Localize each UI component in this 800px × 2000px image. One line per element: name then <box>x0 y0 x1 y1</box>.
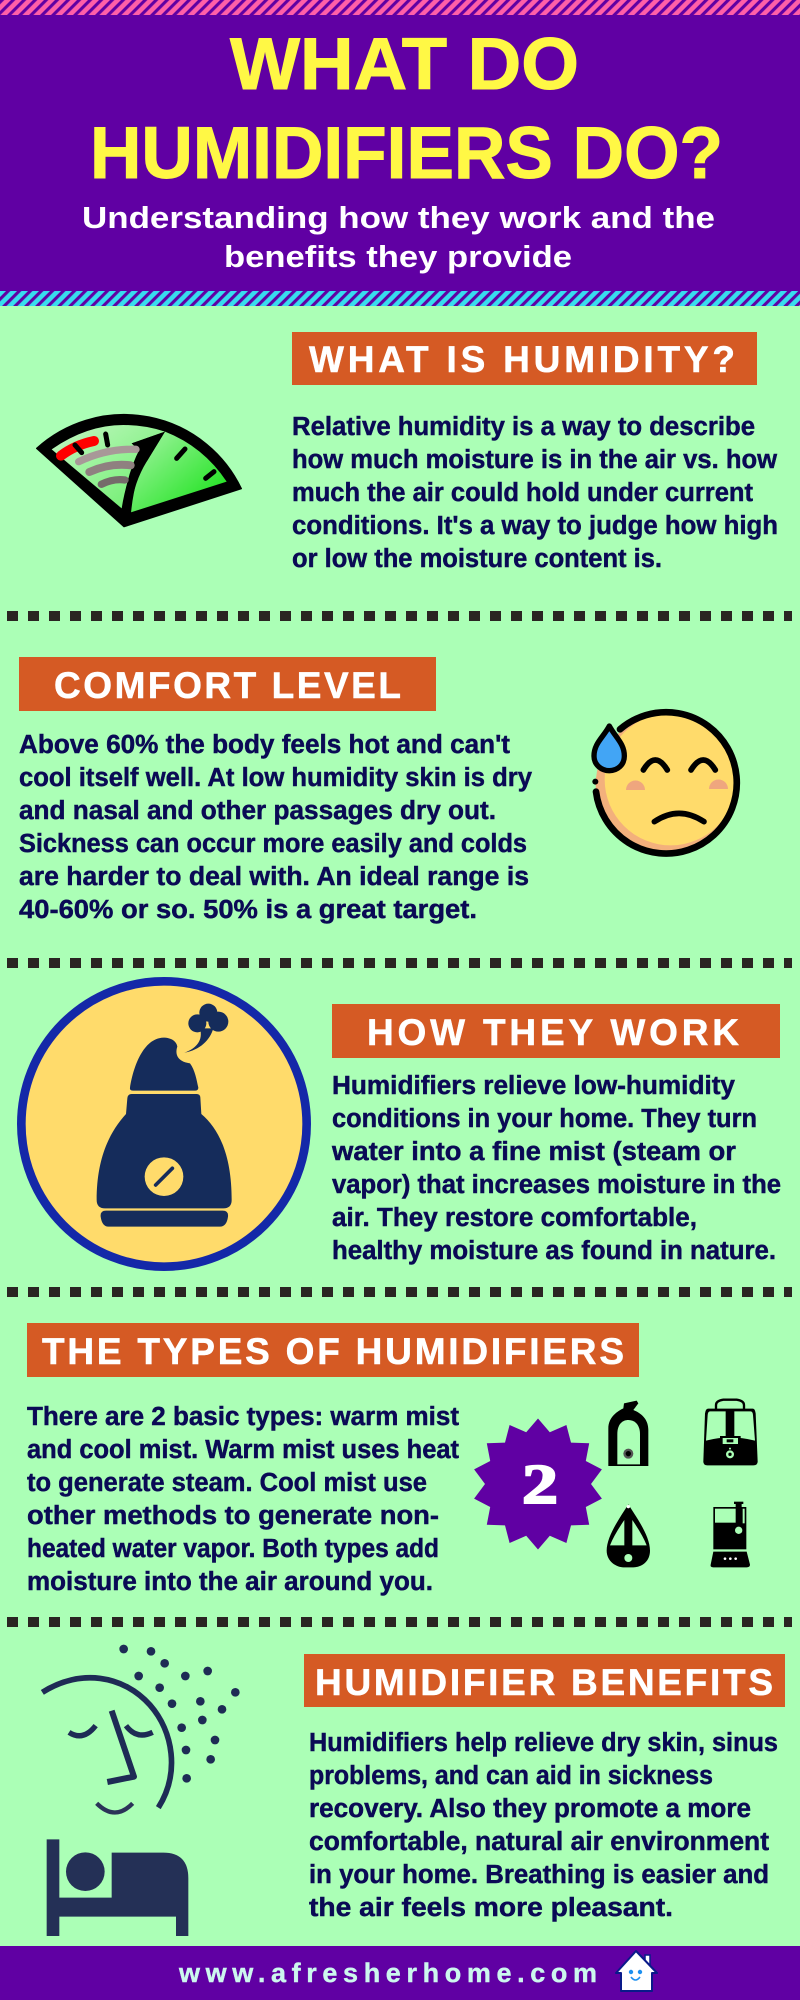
icon: smiling house <box>616 1951 657 1991</box>
text: types of humidifiers: to generate steam. Cool mist use <box>27 1469 427 1497</box>
heading: types of humidifiers: THE TYPES OF HUMIDIFIERS <box>42 1331 624 1372</box>
divider <box>7 611 792 621</box>
text: how they work: Humidifiers relieve low-humidity <box>332 1072 736 1100</box>
text: comfort level: and nasal and other passages dry out. <box>19 797 496 825</box>
icon: square humidifier <box>711 1502 750 1567</box>
text: comfort level: are harder to deal with. An ideal range is <box>19 863 529 891</box>
text: types of humidifiers: other methods to generate non- <box>27 1502 439 1530</box>
text: what is humidity <box>292 413 778 573</box>
heading: how they work <box>332 1004 780 1058</box>
icon: tall humidifier <box>608 1401 648 1466</box>
text: what is humidity: conditions. It's a way to judge how high <box>292 512 778 540</box>
title: WHAT DO <box>230 24 579 105</box>
text: what is humidity: or low the moisture content is. <box>292 545 662 573</box>
heading: comfort level <box>19 657 436 711</box>
section: how they work <box>21 981 781 1267</box>
title: HUMIDIFIERS DO? <box>90 113 723 194</box>
text: types of humidifiers: and cool mist. Warm mist uses heat <box>27 1436 460 1464</box>
icon: sweating sad face <box>592 712 737 855</box>
website url: www.afresherhome.com <box>178 1958 597 1988</box>
subtitle: Understanding how they work and the <box>82 200 715 235</box>
text: humidifier benefits: problems, and can aid in sickness <box>309 1762 713 1790</box>
section: humidifier benefits <box>42 1645 785 1936</box>
text: comfort level: Above 60% the body feels hot and can't <box>19 731 511 759</box>
text: humidifier benefits: the air feels more pleasant. <box>309 1894 673 1922</box>
footer <box>0 1946 800 2000</box>
text: humidifier benefits: recovery. Also they promote a more <box>309 1795 751 1823</box>
text: what is humidity: much the air could hold under current <box>292 479 753 507</box>
text: types of humidifiers: moisture into the air around you. <box>27 1568 433 1596</box>
icon: teardrop humidifier <box>607 1504 650 1567</box>
heading: how they work: HOW THEY WORK <box>367 1012 739 1053</box>
section: what is humidity <box>37 332 778 573</box>
text: humidifier benefits: in your home. Breathing is easier and <box>309 1861 769 1889</box>
text: comfort level: Sickness can occur more easily and colds <box>19 830 527 858</box>
text: what is humidity: Relative humidity is a way to describe <box>292 413 755 441</box>
text: humidifier benefits <box>309 1729 778 1922</box>
icon: handled humidifier <box>703 1400 758 1465</box>
icon: sleeping face with mist <box>42 1645 240 1812</box>
text: what is humidity: how much moisture is in the air vs. how <box>292 446 777 474</box>
section: comfort level <box>19 657 737 924</box>
divider <box>7 1617 792 1627</box>
divider <box>7 1287 792 1297</box>
text: types of humidifiers: There are 2 basic types: warm mist <box>27 1403 460 1431</box>
heading: what is humidity: WHAT IS HUMIDITY? <box>309 339 735 380</box>
text: humidifier benefits: comfortable, natural air environment <box>309 1828 770 1856</box>
icon: humidifier in circle <box>21 981 307 1267</box>
text: how they work <box>331 1072 781 1265</box>
text: comfort level: 40-60% or so. 50% is a great target. <box>19 896 477 924</box>
heading: comfort level: COMFORT LEVEL <box>54 665 401 706</box>
text: how they work: air. They restore comfortable, <box>332 1204 697 1232</box>
text: humidifier benefits: Humidifiers help relieve dry skin, sinus <box>309 1729 778 1757</box>
text: types of humidifiers: heated water vapor. Both types add <box>27 1535 439 1563</box>
subtitle <box>82 200 715 274</box>
heading: humidifier benefits: HUMIDIFIER BENEFITS <box>315 1662 773 1703</box>
text: how they work: conditions in your home. They turn <box>332 1105 757 1133</box>
text: types of humidifiers <box>27 1403 460 1596</box>
icon: humidity gauge <box>37 415 241 527</box>
text: how they work: healthy moisture as found in nature. <box>332 1237 776 1265</box>
text: comfort level <box>19 731 533 924</box>
text: comfort level: cool itself well. At low humidity skin is dry <box>19 764 533 792</box>
header banner <box>0 0 800 306</box>
top pink stripe <box>0 0 800 15</box>
subtitle: benefits they provide <box>224 239 572 274</box>
section: types of humidifiers <box>27 1323 758 1596</box>
badge: number 2 starburst: 2 <box>522 1454 558 1516</box>
badge: number 2 starburst <box>474 1418 602 1550</box>
text: how they work: vapor) that increases moisture in the <box>332 1171 781 1199</box>
bottom cyan stripe <box>0 291 800 306</box>
divider <box>7 958 792 968</box>
icon: bed <box>47 1839 188 1936</box>
text: how they work: water into a fine mist (steam or <box>331 1138 736 1166</box>
title <box>90 24 723 194</box>
icons: four humidifier types <box>607 1400 758 1567</box>
